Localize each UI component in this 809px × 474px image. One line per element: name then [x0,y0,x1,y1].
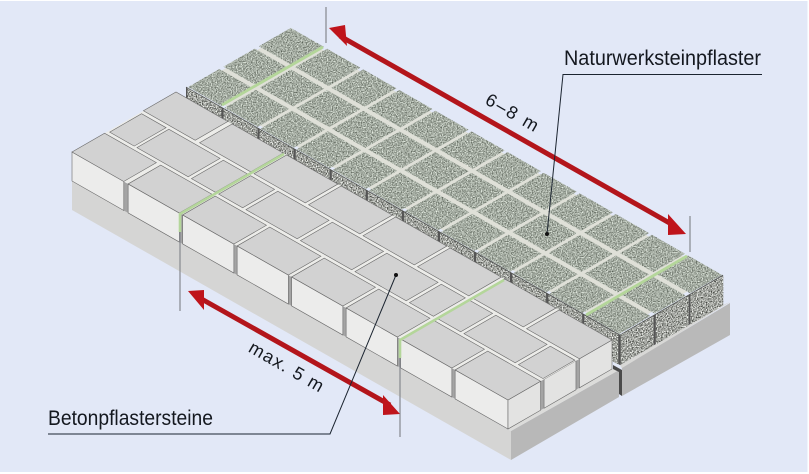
natural stone side faces [186,87,723,365]
panel: natural stone paving [186,28,723,365]
callout: Naturwerksteinpflaster: Naturwerksteinpflaster [564,47,761,70]
concrete right faces [508,340,612,429]
concrete joints [72,92,612,400]
natural stone joints [193,31,716,331]
concrete paver tops [72,92,612,400]
concrete expansion joints [180,154,504,358]
callout: Betonpflastersteine [48,273,398,434]
dimension ticks [180,7,690,437]
natural stone expansion joints [222,47,687,315]
concrete side backing [72,152,612,429]
foundation joint [613,365,622,396]
natural stone front edge lines [186,87,723,365]
foundation: natural stone bed [620,302,730,396]
panel: concrete paving [72,92,612,429]
callout: Betonpflastersteine: Betonpflastersteine [48,407,213,430]
concrete left faces [72,152,508,429]
natural stone tops [188,28,722,334]
dimension label: 6–8 m: 6–8 m [482,89,544,137]
arrow: max. 5 m length [188,290,400,415]
callout: Naturwerksteinpflaster [545,47,762,236]
foundation: concrete paver bed [72,180,619,460]
dimension label: max. 5 m: max. 5 m [245,337,329,397]
arrow: 6–8 m length [329,25,686,235]
